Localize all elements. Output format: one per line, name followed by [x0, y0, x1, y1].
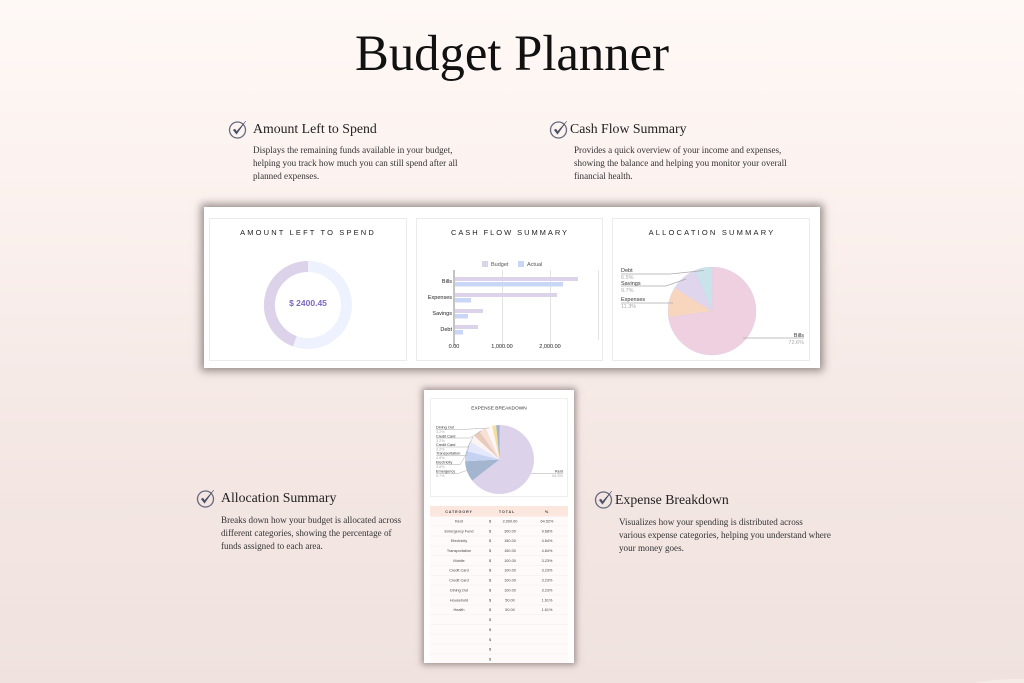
table rows: $	[489, 658, 492, 662]
description: helping you track how much you can still spend after all	[253, 158, 458, 168]
pie labels: Transportation	[436, 452, 460, 456]
table rows: 150.00	[504, 549, 516, 553]
table rows: 100.00	[504, 579, 516, 583]
table rows: Credit Card	[449, 579, 469, 583]
icon: check	[196, 490, 214, 508]
icon: check	[594, 491, 612, 509]
table rows: Transportation	[447, 549, 471, 553]
table rows: $	[489, 648, 492, 652]
heading: Cash Flow Summary	[570, 121, 687, 136]
table rows: 64.52%	[541, 520, 554, 524]
feature: cash flow summary	[550, 121, 787, 181]
legend: Budget	[491, 262, 509, 268]
table rows: Credit Card	[449, 569, 469, 573]
table rows: 3.23%	[542, 588, 553, 592]
pie labels: Expenses	[621, 297, 645, 303]
donut chart: $ 2400.45	[289, 298, 327, 308]
description: Provides a quick overview of your income and expenses,	[574, 145, 781, 155]
legend	[482, 261, 542, 268]
pie labels: Bills	[794, 333, 804, 339]
pie chart	[465, 425, 534, 494]
pie labels: Dining Out	[436, 426, 455, 430]
panel: dashboard summary	[204, 207, 820, 368]
description: showing the balance and helping you monitor your overall	[574, 158, 787, 168]
table rows: 2,000.00	[503, 520, 517, 524]
decorative corner curve	[975, 678, 1024, 683]
pie labels: 6.5%	[621, 275, 634, 281]
card: amount left to spend	[209, 218, 407, 361]
pie labels: 9.7%	[621, 288, 634, 294]
pie labels: Electricity	[436, 460, 452, 464]
icon: check	[228, 121, 246, 139]
description: Displays the remaining funds available in your budget,	[253, 145, 453, 155]
bar chart: Savings	[432, 311, 452, 317]
bar chart	[428, 270, 598, 350]
card: cash flow summary: CASH FLOW SUMMARY	[451, 228, 569, 237]
bar chart: Expenses	[428, 295, 452, 301]
table rows: $	[489, 520, 492, 524]
pie labels	[436, 426, 564, 478]
heading: Amount Left to Spend	[253, 121, 377, 136]
heading: Expense Breakdown	[615, 492, 729, 507]
panel: expense breakdown sheet	[424, 390, 574, 663]
table rows: 300.00	[504, 529, 516, 533]
pie labels: 3.2%	[436, 439, 445, 443]
table rows: $	[489, 588, 492, 592]
table rows: Health	[454, 608, 464, 612]
description: funds assigned to each area.	[221, 541, 323, 551]
table rows: 3.23%	[542, 579, 553, 583]
table header: TOTAL	[499, 510, 515, 514]
card: cash flow summary	[416, 218, 603, 361]
table rows: Dining Out	[450, 588, 469, 592]
bar chart: Bills	[442, 279, 452, 285]
table rows: 4.84%	[542, 539, 553, 543]
pie labels: Credit Card	[436, 443, 455, 447]
pie labels: 72.6%	[788, 340, 804, 346]
donut chart	[269, 266, 346, 344]
bar chart: 1,000.00	[491, 344, 513, 350]
legend: Actual	[527, 262, 542, 268]
pie labels: Savings	[621, 281, 641, 287]
pie chart	[668, 267, 756, 355]
table rows: 3.23%	[542, 559, 553, 563]
table header	[430, 506, 568, 516]
table rows: Household	[450, 598, 468, 602]
table rows: Mobile	[453, 559, 465, 563]
card: expense pie	[430, 398, 568, 496]
table rows: 100.00	[504, 559, 516, 563]
pie labels: Emergency	[436, 470, 455, 474]
description	[574, 145, 787, 181]
table rows	[445, 520, 554, 662]
bar chart: Debt	[440, 327, 452, 333]
icon: check	[550, 121, 568, 139]
table rows: 100.00	[504, 588, 516, 592]
feature: allocation summary	[196, 490, 401, 551]
card: allocation summary	[612, 218, 810, 361]
description: financial health.	[574, 171, 633, 181]
expense table	[430, 506, 568, 663]
heading: Allocation Summary	[221, 490, 336, 505]
table rows: 150.00	[504, 539, 516, 543]
table rows: Rent	[455, 520, 464, 524]
description: planned expenses.	[253, 171, 319, 181]
bar chart: 2,000.00	[539, 344, 561, 350]
table rows: $	[489, 579, 492, 583]
pie labels: 9.7%	[436, 474, 445, 478]
description: Breaks down how your budget is allocated across	[221, 515, 401, 525]
description	[619, 517, 831, 553]
feature: amount left to spend	[228, 121, 458, 181]
description	[253, 145, 458, 181]
table rows: 3.23%	[542, 569, 553, 573]
card: expense pie: EXPENSE BREAKDOWN	[471, 406, 527, 412]
bar chart: 0.00	[449, 344, 459, 350]
table header: %	[545, 510, 549, 514]
table rows: $	[489, 539, 492, 543]
table rows: 1.61%	[542, 598, 553, 602]
table rows: $	[489, 549, 492, 553]
table rows: $	[489, 608, 492, 612]
table rows: 4.84%	[542, 549, 553, 553]
description: various expense categories, helping you understand where	[619, 530, 831, 540]
pie labels: 3.2%	[436, 430, 445, 434]
card: amount left to spend: AMOUNT LEFT TO SPEND	[240, 228, 376, 237]
table rows: $	[489, 618, 492, 622]
table rows: 100.00	[504, 569, 516, 573]
pie labels: 64.5%	[552, 474, 564, 478]
pie labels	[621, 268, 804, 346]
table rows: 50.00	[505, 608, 515, 612]
description: your money goes.	[619, 543, 684, 553]
table rows: Electricity	[451, 539, 467, 543]
pie labels: 3.2%	[436, 448, 445, 452]
table rows: Emergency Fund	[445, 529, 473, 533]
table rows: 50.00	[505, 598, 515, 602]
card: allocation summary: ALLOCATION SUMMARY	[649, 228, 775, 237]
pie labels: 4.8%	[436, 456, 445, 460]
pie labels: 4.8%	[436, 465, 445, 469]
table rows: $	[489, 628, 492, 632]
title: Budget Planner	[355, 25, 669, 81]
description	[221, 515, 401, 551]
table rows: 9.68%	[542, 529, 553, 533]
table rows: $	[489, 638, 492, 642]
table rows: $	[489, 529, 492, 533]
pie labels: Debt	[621, 268, 633, 274]
table header: CATEGORY	[445, 510, 473, 514]
pie labels: Credit Card	[436, 434, 455, 438]
table rows: $	[489, 598, 492, 602]
table rows: $	[489, 569, 492, 573]
description: Visualizes how your spending is distributed across	[619, 517, 803, 527]
table rows: 1.61%	[542, 608, 553, 612]
feature: expense breakdown	[594, 491, 831, 553]
description: different categories, showing the percentage of	[221, 528, 392, 538]
pie labels: 11.3%	[621, 304, 636, 310]
pie labels: Rent	[555, 470, 564, 474]
table rows: $	[489, 559, 492, 563]
